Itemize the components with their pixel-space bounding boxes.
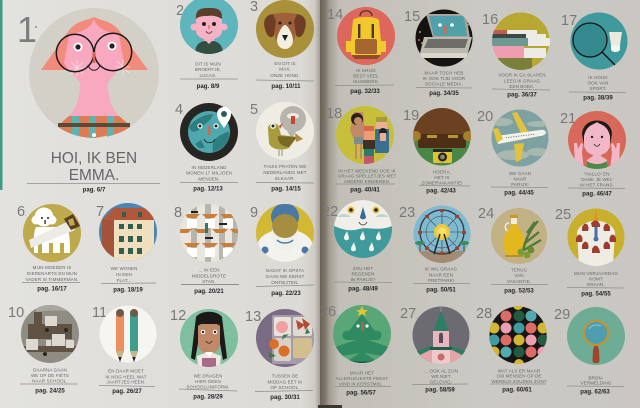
contents item 2: Lucas: pag. 8/9 (197, 83, 220, 90)
contents item 18: children: IN HET WEEKEND DOE IK (338, 168, 396, 174)
contents item 21: girl signalling hello (560, 111, 626, 198)
contents item 19: suitcase and camera: pag. 42/43 (426, 188, 456, 194)
contents item 3: Max the dog (250, 0, 314, 90)
contents item 26: Christmas tree: VIND IK KERSTMIS... (339, 382, 385, 386)
contents item 14: backpack (327, 7, 395, 95)
contents item 6: poodle and saw: VADER IS TIMMERMAN. (25, 277, 79, 282)
contents item 16: books: pag. 36/37 (507, 92, 537, 98)
contents item 10: bicycle pattern: 10. (8, 305, 26, 321)
contents item 17: racket and shuttlecock: IK HOUD (588, 75, 608, 80)
contents item 18: children (326, 106, 396, 194)
contents item 4: globe: pag. 12/13 (193, 186, 223, 192)
contents item 9: coffee cup: 9. (250, 205, 259, 221)
contents item 18: children: GRAAG SPELLETJES MET (338, 174, 396, 178)
contents item 21: girl signalling hello: IN HET FRANS. (580, 182, 614, 188)
contents item 29: magnifying glass (554, 307, 625, 396)
contents item 24: olive oil: pag. 52/53 (504, 288, 534, 294)
contents item 2: Lucas: 2. (176, 3, 185, 19)
contents item 4: globe: 4. (175, 102, 184, 118)
contents item 17: racket and shuttlecock: SPORT. (590, 86, 606, 91)
contents item 6: poodle and saw: MIJN MOEDER IS (33, 265, 71, 270)
contents item 11: pencils: 11. (92, 305, 108, 321)
contents item 3: Max the dog: EN DIT IS (274, 61, 296, 66)
contents item 17: racket and shuttlecock: pag. 38/39 (583, 94, 613, 102)
contents item 25: birthday candles: KOMT (589, 276, 603, 282)
contents item 10: bicycle pattern (8, 305, 79, 394)
contents item 14: backpack: BEST VEEL (353, 74, 379, 78)
contents item 14: backpack: HUISWERK. (353, 79, 379, 84)
contents item 17: racket and shuttlecock (561, 12, 628, 102)
contents item 11: pencils: JAARTJES HEEN. (106, 380, 146, 384)
contents item 11: pencils (92, 305, 156, 395)
contents item 2: Lucas: LUCAS. (200, 73, 216, 78)
contents item 17: racket and shuttlecock: OOK VAN (587, 80, 609, 86)
contents item 29: magnifying glass: BRON- (588, 376, 604, 380)
contents item 22: rain cloud (322, 200, 392, 292)
contents item 4: globe: MENSEN. (198, 176, 220, 182)
contents item 22: rain cloud: pag. 48/49 (348, 286, 378, 292)
contents item 11: pencils: IK NOG HEEL WAT (105, 374, 147, 380)
contents item 13: lunch tray: MIDDAG EET IK (268, 380, 302, 384)
contents item 24: olive oil: TERUG (511, 268, 528, 272)
contents item 9: coffee cup (250, 203, 314, 297)
contents item 2: Lucas: DIT IS MIJN (195, 62, 221, 66)
contents item 7: apartment building: IN EEN (116, 272, 132, 277)
contents item 23: ferris wheel: IK WIL GRAAG (425, 266, 458, 272)
contents item 8: town rooftops: MIDDELGROTE (192, 274, 226, 278)
contents item 9: coffee cup: NADAT IK OPSTA (266, 268, 304, 273)
contents item 7: apartment building: WE WONEN (111, 266, 137, 271)
contents item 12: girl with school uniform: pag. 28/29 (193, 394, 223, 400)
contents item 5: bird and speech bubble (250, 102, 314, 192)
contents item 25: birthday candles: MIJN VERJAARDAG (574, 271, 618, 276)
contents item 12: girl with school uniform (170, 308, 238, 400)
contents item 3: Max the dog: pag. 10/11 (271, 83, 301, 90)
contents item 23: ferris wheel: NAAR EEN (429, 272, 453, 278)
contents item 24: olive oil: 24. (478, 206, 496, 222)
contents item 10: bicycle pattern: pag. 24/25 (35, 388, 65, 394)
contents item 8: town rooftops: 8. (174, 205, 183, 221)
contents item 16: books: LEES IK GRAAG (504, 78, 540, 84)
contents item 15: laptop: pag. 34/35 (429, 90, 459, 97)
contents item 6: poodle and saw: pag. 16/17 (37, 286, 67, 292)
contents item 3: Max the dog: MAX, (279, 66, 291, 72)
contents item 4: globe (175, 102, 238, 192)
contents item 26: Christmas tree: MAAR HET (350, 370, 374, 376)
contents item 24: olive oil (478, 206, 548, 294)
contents item 25: birthday candles: 25. (555, 207, 573, 223)
contents item 27: church: GELOVIG. (430, 380, 452, 384)
contents item 25: birthday candles (555, 207, 624, 298)
contents item 13: lunch tray (245, 309, 314, 401)
contents item 29: magnifying glass: VERMELDING (581, 380, 612, 386)
contents item 28: coloured dots: WERELD ZOUDEN ZIJN? (491, 379, 547, 384)
contents item 6: poodle and saw: DIERENARTS EN MIJN (27, 271, 77, 276)
contents item 20: airplane: 20. (477, 109, 495, 125)
contents item 8: town rooftops: STAD. (202, 279, 216, 284)
contents item 10: bicycle pattern: WE OP DE FIETS (31, 373, 69, 378)
contents item 7: apartment building: FLAT... (117, 278, 131, 283)
contents item 15: laptop (404, 9, 472, 97)
contents item 19: suitcase and camera (403, 108, 473, 194)
contents item 15: laptop: IK OOK TIJD VOOR (423, 76, 466, 81)
contents item 23: ferris wheel: PRETPARK! (428, 278, 454, 283)
contents item 15: laptop: 15. (404, 9, 422, 25)
contents item 27: church (400, 306, 470, 394)
contents item 21: girl signalling hello: pag. 46/47 (582, 190, 612, 198)
contents item 16: books: EEN BOEK. (509, 84, 535, 89)
contents item 21: girl signalling hello: 'DANK JE WEL' (580, 177, 614, 182)
contents item 20: airplane: PARIJS! (511, 182, 529, 187)
contents item 19: suitcase and camera: HOERA, (433, 170, 451, 174)
contents item 18: children: 18. (326, 106, 344, 122)
contents item 12: girl with school uniform: SCHOOLUNIFORM. (187, 384, 229, 390)
left page background (0, 0, 321, 408)
contents item 14: backpack: pag. 32/33 (350, 88, 380, 95)
contents item 15: laptop: MAAR TOCH HEB (425, 70, 463, 76)
contents item 10: bicycle pattern: DAARNA GAAN (33, 368, 67, 372)
contents item 1: Emma (17, 8, 160, 194)
contents item 27: church: 27. (400, 306, 418, 322)
right page background (320, 0, 640, 408)
contents item 13: lunch tray: pag. 30/31 (270, 394, 300, 401)
contents item 20: airplane (477, 109, 549, 196)
contents item 22: rain cloud: ZOU HET (353, 266, 373, 271)
contents item 29: magnifying glass: pag. 62/63 (580, 388, 610, 396)
page reference: pag. 6/7 (83, 186, 106, 194)
contents item 9: coffee cup: ONTBIJTEN. (271, 280, 299, 285)
contents item 12: girl with school uniform: HIER GEEN (195, 379, 221, 384)
contents item 20: airplane: pag. 44/45 (504, 190, 534, 196)
contents item 4: globe: IN NEDERLAND (192, 165, 227, 170)
contents item 18: children: ANDERE KINDEREN. (344, 179, 390, 184)
contents item 7: apartment building: 7. (96, 204, 105, 220)
contents item 23: ferris wheel: 23. (399, 205, 417, 221)
contents item 22: rain cloud: IN PARIJS? (351, 277, 376, 282)
contents item 16: books: 16. (482, 12, 500, 28)
contents item 28: coloured dots: WAT ALS ER MAAR (498, 368, 541, 374)
contents item 25: birthday candles: ERAAN. (587, 282, 605, 287)
contents item 3: Max the dog: ONZE HOND. (270, 73, 300, 78)
contents item 14: backpack: IK KRIJG (356, 68, 376, 73)
contents item 7: apartment building: pag. 18/19 (113, 286, 143, 294)
contents item 22: rain cloud: REGENEN (351, 272, 375, 276)
contents item 21: girl signalling hello: 'HALLO' EN (584, 172, 610, 176)
contents item 10: bicycle pattern: NAAR SCHOOL. (32, 378, 68, 384)
contents item 13: lunch tray: 13. (245, 309, 263, 325)
contents item 27: church: ... OOK AL ZIJN (424, 368, 458, 374)
contents item 9: coffee cup: pag. 22/23 (271, 290, 301, 297)
contents item 27: church: pag. 58/59 (425, 386, 455, 394)
contents item 8: town rooftops: pag. 20/21 (194, 288, 224, 295)
contents item 7: apartment building (96, 203, 157, 294)
contents item 8: town rooftops (174, 204, 239, 294)
contents item 5: bird and speech bubble: ELKAAR. (275, 176, 295, 181)
number 1: 1 (17, 9, 37, 50)
contents item 5: bird and speech bubble: 5. (250, 102, 259, 118)
contents item 24: olive oil: VAN (514, 273, 524, 278)
contents item 26: Christmas tree: 26. (320, 304, 338, 320)
contents item 4: globe: WONEN 17 MILJOEN (186, 170, 232, 176)
contents item 19: suitcase and camera: ZOMERVAKANTIE! (421, 180, 463, 186)
contents item 27: church: WE NIET (431, 374, 451, 379)
contents item 26: Christmas tree (320, 304, 391, 396)
contents item 16: books: VOOR IK GA SLAPEN (498, 72, 546, 78)
contents item 26: Christmas tree: pag. 56/57 (346, 390, 376, 396)
contents item 1: Emma: EMMA. (69, 167, 119, 184)
contents item 28: coloured dots (476, 300, 548, 394)
contents item 17: racket and shuttlecock: 17. (561, 13, 579, 29)
contents item 25: birthday candles: pag. 54/55 (581, 290, 611, 298)
contents item 8: town rooftops: ... IN EEN (198, 268, 220, 272)
contents item 15: laptop: SOCIALE MEDIA. (425, 82, 463, 86)
contents item 28: coloured dots: 28. (476, 306, 494, 322)
contents item 11: pencils: EN DAAR MOET (108, 368, 144, 374)
contents item 20: airplane: WE GAAN (509, 171, 531, 176)
contents item 6: poodle and saw: 6. (17, 204, 26, 220)
contents item 2: Lucas (176, 0, 238, 90)
page bottom edge (318, 405, 342, 408)
contents item 16: books (482, 12, 550, 98)
contents item 6: poodle and saw (17, 204, 81, 292)
contents item 5: bird and speech bubble: pag. 14/15 (271, 186, 301, 192)
teal edge strip (0, 0, 2, 190)
contents item 24: olive oil: VAKANTIE. (507, 279, 531, 284)
contents item 11: pencils: pag. 26/27 (112, 388, 142, 395)
contents item 19: suitcase and camera: HET IS (434, 175, 450, 180)
contents item 14: backpack: 14. (327, 7, 345, 23)
contents item 19: suitcase and camera: 19. (403, 108, 421, 124)
contents item 28: coloured dots: 100 MENSEN OP DE (496, 374, 542, 378)
contents item 9: coffee cup: GAAN WE EERST (265, 274, 305, 279)
contents item 29: magnifying glass: 29. (554, 307, 572, 323)
contents item 5: bird and speech bubble: NEDERLANDS MET (263, 170, 307, 175)
contents item 5: bird and speech bubble: THUIS PRATEN WE (264, 164, 306, 169)
contents item 2: Lucas: BROERTJE, (195, 67, 221, 72)
icon: Emma portrait (29, 8, 159, 139)
heading: HOI, IK BEN (51, 150, 137, 167)
contents item 20: airplane: NAAR (514, 176, 527, 182)
contents item 12: girl with school uniform: 12. (170, 308, 188, 324)
contents item 26: Christmas tree: ALLERLEUKSTE FEEST (336, 376, 388, 381)
contents item 18: children: pag. 40/41 (350, 186, 380, 194)
contents item 13: lunch tray: OP SCHOOL. (270, 385, 300, 390)
contents item 21: girl signalling hello: 21. (560, 111, 578, 127)
contents item 12: girl with school uniform: WE DRAGEN (194, 374, 222, 378)
contents item 13: lunch tray: TUSSEN DE (272, 374, 298, 378)
contents item 23: ferris wheel (399, 205, 471, 294)
contents item 23: ferris wheel: pag. 50/51 (426, 286, 456, 294)
contents item 28: coloured dots: pag. 60/61 (502, 386, 532, 394)
contents item 22: rain cloud: 22. (322, 204, 340, 220)
